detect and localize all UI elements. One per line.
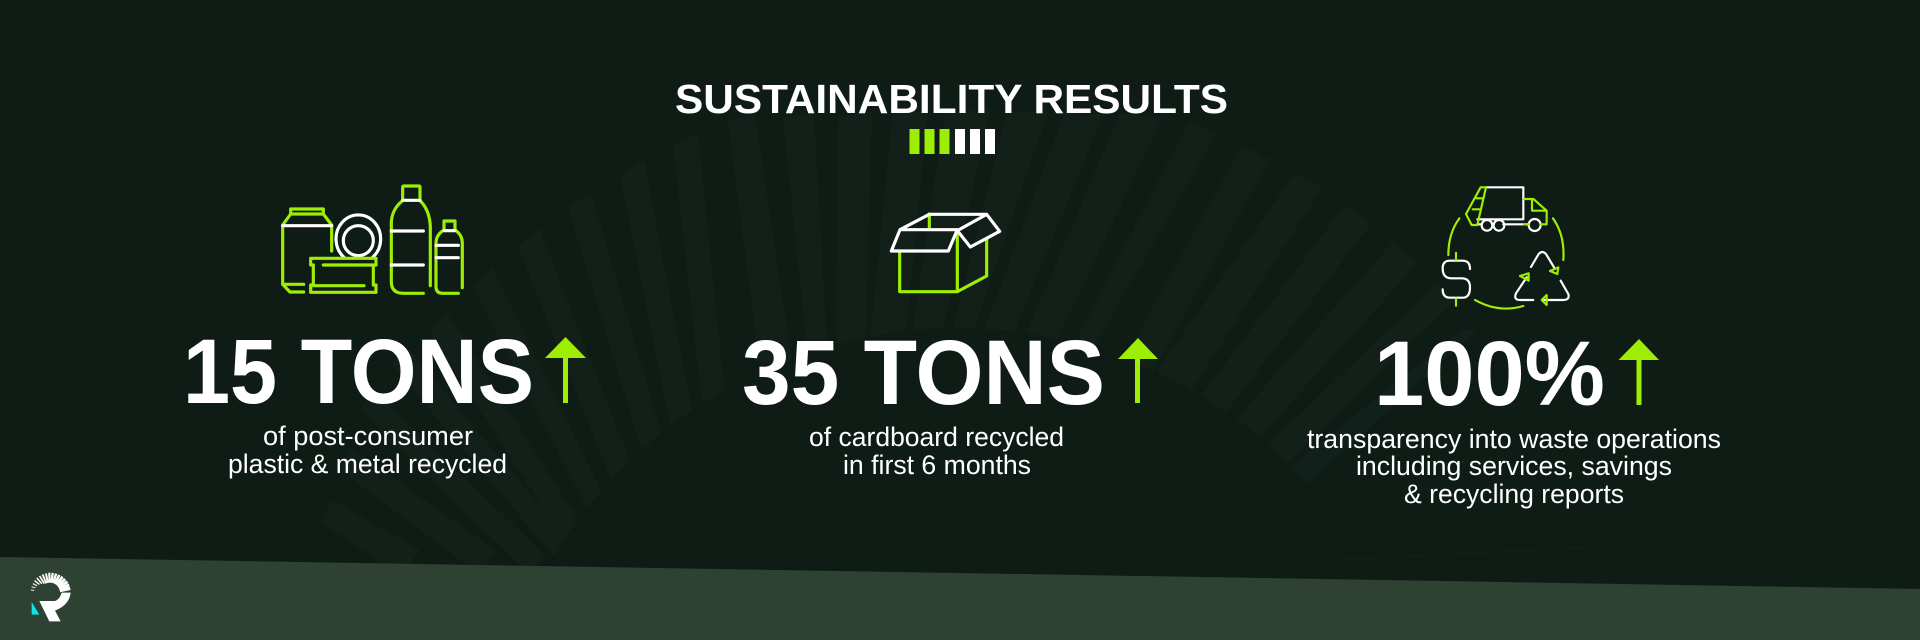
description: transparency: transparency into waste operations <box>1307 424 1721 454</box>
description: transparency: including services, savings <box>1356 451 1672 481</box>
description: transparency <box>1307 424 1721 509</box>
icon: open cardboard box <box>891 214 1000 292</box>
stat: 100 percent: 100% <box>1374 323 1605 425</box>
description: plastic and metal: of post-consumer <box>263 421 473 451</box>
description: transparency: & recycling reports <box>1404 479 1624 509</box>
title: SUSTAINABILITY RESULTS <box>675 76 1228 122</box>
arrow up <box>1118 338 1158 403</box>
logo <box>31 573 71 621</box>
title progress bars <box>910 129 995 154</box>
stat: 15 tons: 15 TONS <box>183 321 534 423</box>
arrow up <box>545 337 586 403</box>
description: plastic and metal: plastic & metal recycled <box>228 449 507 479</box>
description: cardboard: of cardboard recycled <box>809 422 1064 452</box>
description: cardboard: in first 6 months <box>843 450 1031 480</box>
background: radial ray burst <box>322 110 1597 640</box>
icon: containers, bottles and can <box>283 186 462 293</box>
description: plastic and metal <box>228 421 507 479</box>
description: cardboard <box>809 422 1064 480</box>
arrow up <box>1618 339 1659 405</box>
icon: truck, savings and recycling cycle <box>1443 187 1569 309</box>
stat: 35 tons: 35 TONS <box>742 322 1105 424</box>
footer band <box>0 557 1920 640</box>
